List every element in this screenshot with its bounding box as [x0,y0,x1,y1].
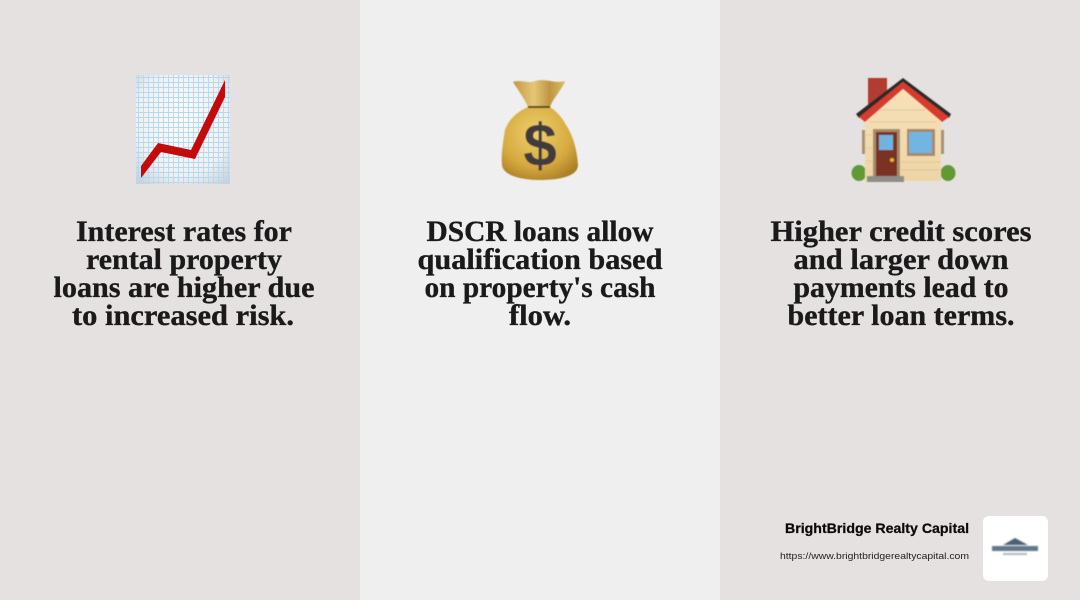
text: interest rates statement: loans are higher due [54,271,314,304]
panel: interest rates [0,0,360,600]
text: credit scores statement: better loan terms. [788,299,1014,332]
text: interest rates statement: rental property [86,243,282,276]
text: credit scores statement [770,215,1032,332]
panel: DSCR loans [360,0,720,600]
text: DSCR statement: on property's cash [424,271,656,304]
text: credit scores statement: payments lead to [794,271,1008,304]
text: DSCR statement: qualification based [418,243,663,276]
text: company name: BrightBridge Realty Capital [785,520,969,536]
text: website: https://www.brightbridgerealtycapital.com [780,551,969,562]
text: interest rates statement: to increased risk. [72,299,294,332]
panel: credit scores [720,0,1080,600]
icon: money bag [502,80,578,180]
logo tile [983,516,1048,581]
dollar sign: $ [523,112,557,179]
text: DSCR statement: DSCR loans allow [426,215,654,248]
icon: rising chart [136,75,230,184]
text: DSCR statement: flow. [509,299,571,332]
text: DSCR statement [418,215,663,332]
text: credit scores statement: and larger down [794,243,1009,276]
text: credit scores statement: Higher credit scores [770,215,1032,248]
icon: house [852,78,956,182]
footer: brand block [780,516,1048,581]
text: interest rates statement: Interest rates for [76,215,292,248]
text: interest rates statement [54,215,314,332]
